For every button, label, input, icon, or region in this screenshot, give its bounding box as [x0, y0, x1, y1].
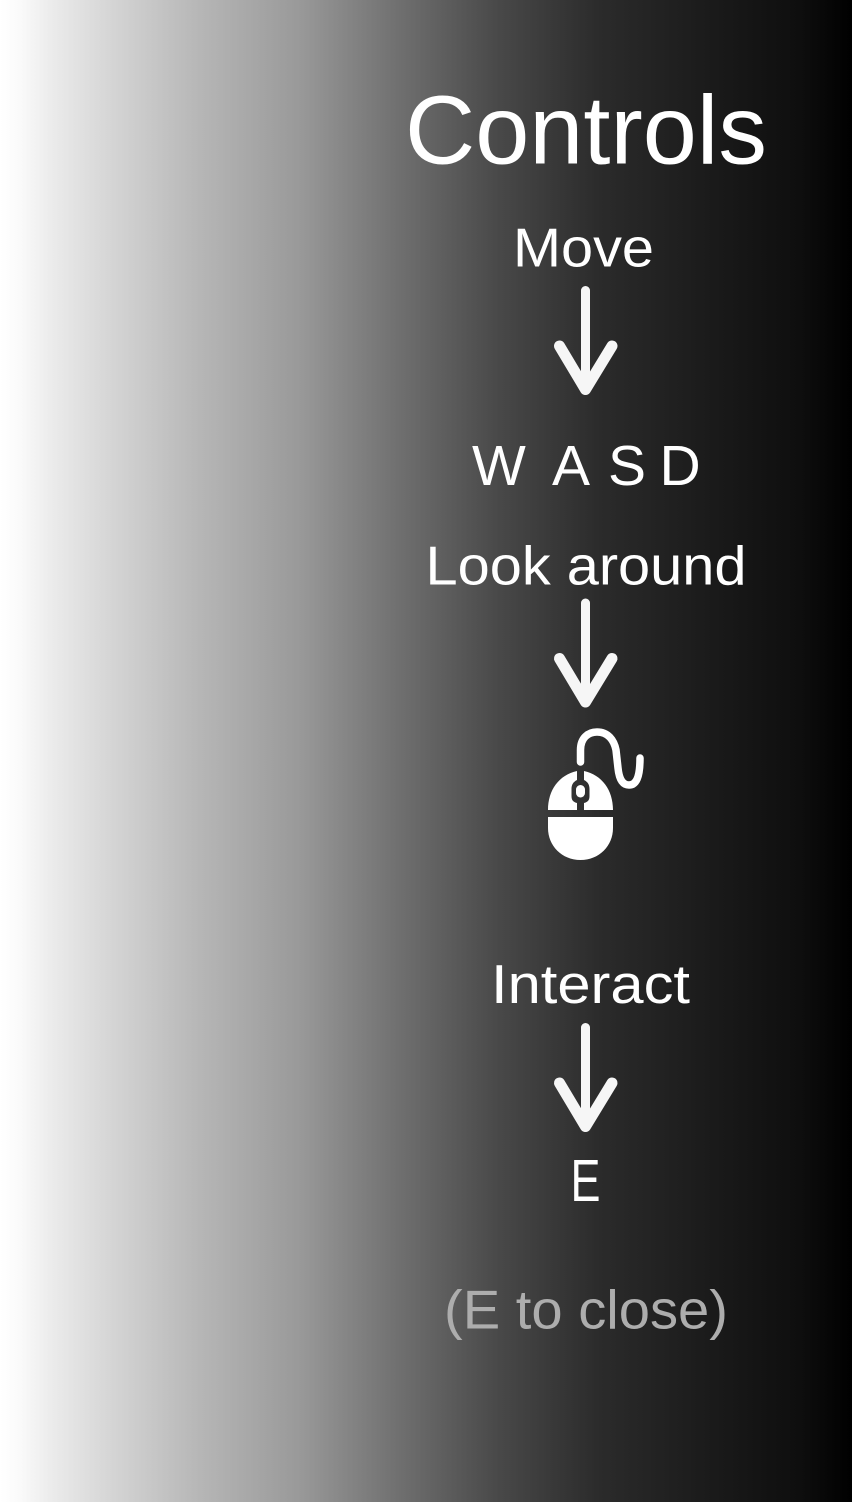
- mouse cable: [580, 732, 640, 785]
- arrow: look to mouse: [560, 603, 612, 702]
- note: E to close: (E to close): [444, 1278, 728, 1340]
- mouse upper shell right: [584, 771, 613, 810]
- icon: computer mouse: [548, 732, 640, 860]
- arrow: move to keys: [560, 290, 612, 390]
- title: Controls: [405, 76, 767, 184]
- key: E: E: [570, 1148, 600, 1214]
- label: look around: Look around: [426, 534, 746, 596]
- keys: WASD: W A S D: [472, 434, 701, 498]
- mouse wheel: [576, 785, 585, 798]
- mouse upper shell left: [548, 771, 577, 810]
- arrow: interact to key: [560, 1028, 612, 1126]
- mouse lower shell: [548, 817, 613, 860]
- label: interact: Interact: [491, 953, 690, 1015]
- label: move: Move: [513, 216, 654, 278]
